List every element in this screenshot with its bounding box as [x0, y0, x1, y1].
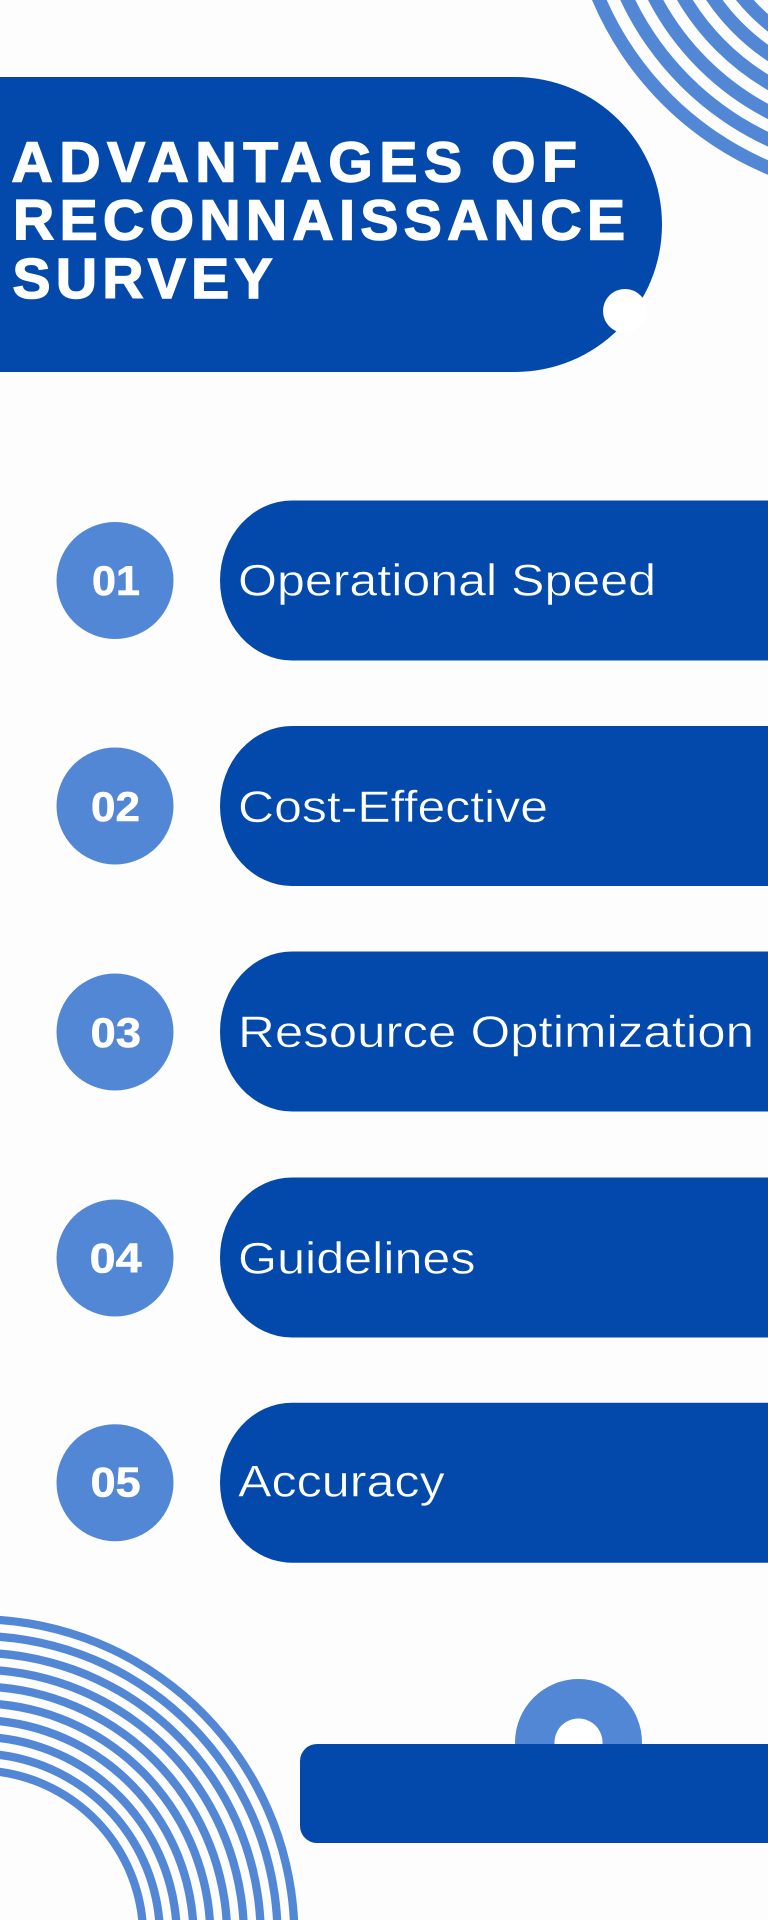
item 04: Guidelines: 04: [90, 1235, 142, 1282]
footer bar: [300, 1744, 768, 1843]
footer ring ornament: [515, 1679, 642, 1806]
item 05: Accuracy: Accuracy: [238, 1458, 446, 1507]
item 05: Accuracy: [56, 1403, 768, 1563]
title text: RECONNAISSANCE: [13, 189, 625, 253]
item 04: Guidelines: [56, 1178, 768, 1338]
item 03: Resource Optimization: 03: [91, 1009, 141, 1056]
item 01: Operational Speed: Operational Speed: [238, 557, 656, 606]
title text: SURVEY: [12, 247, 272, 311]
title text: ADVANTAGES OF: [12, 130, 577, 194]
item 03: Resource Optimization: Resource Optimization: [238, 1008, 754, 1057]
banner notch circle: [603, 289, 647, 333]
item 01: Operational Speed: [56, 500, 768, 660]
item 04: Guidelines: Guidelines: [238, 1234, 476, 1284]
item 01: Operational Speed: 01: [92, 557, 140, 604]
item 05: Accuracy: 05: [91, 1459, 141, 1506]
item 02: Cost-Effective: 02: [91, 783, 140, 830]
item 02: Cost-Effective: [56, 726, 768, 886]
item 02: Cost-Effective: Cost-Effective: [238, 783, 548, 832]
title text: [12, 130, 625, 311]
title banner: [0, 77, 662, 372]
decorative concentric arcs: bottom left: [0, 1616, 298, 1920]
item 03: Resource Optimization: [56, 952, 768, 1112]
decorative concentric arcs: top right: [592, 0, 768, 175]
